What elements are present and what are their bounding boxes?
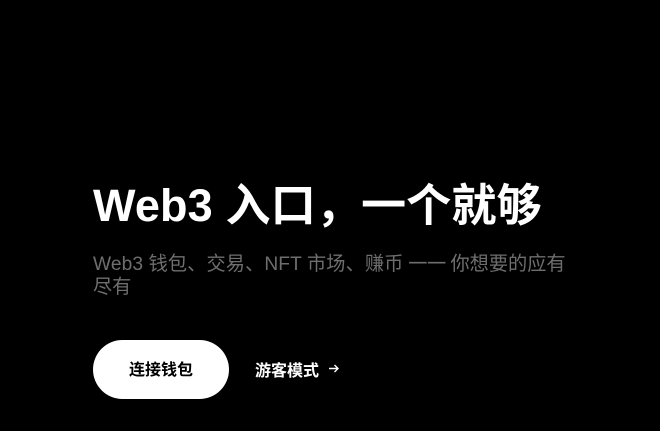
subtitle: Web3 钱包、交易、NFT 市场、赚币 一一 你想要的应有尽有 <box>93 254 566 298</box>
button: connect wallet <box>93 340 229 399</box>
link: guest mode: 游客模式 <box>255 363 319 380</box>
button: connect wallet: 连接钱包 <box>129 362 193 379</box>
title: Web3 入口，一个就够 <box>93 180 542 231</box>
icon: arrow <box>329 364 339 372</box>
